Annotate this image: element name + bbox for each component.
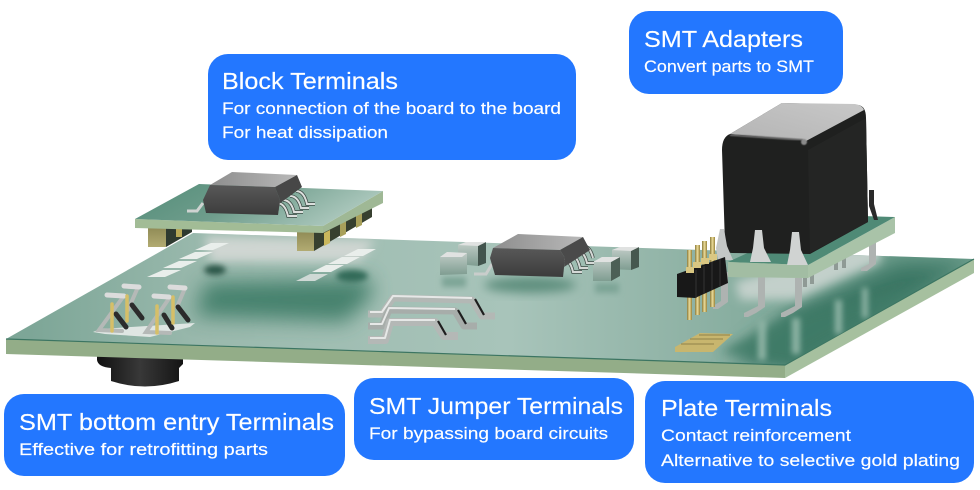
solder pads: block terminal footprint: [147, 243, 376, 281]
callout: SMT Adapters: Convert parts to SMT: [644, 58, 814, 76]
module SOP chip: [187, 172, 315, 216]
callout: Plate Terminals: Contact reinforcement: [661, 427, 851, 445]
small capacitors around center chip: [440, 242, 639, 281]
standoff blocks: [148, 203, 372, 251]
adapter cones: [716, 229, 808, 265]
callout: SMT Jumper Terminals: For bypassing board circuits: [369, 425, 608, 443]
callout: SMT bottom entry Terminals: Effective for retrofitting parts: [19, 441, 268, 459]
callout: Plate Terminals: Plate Terminals: [661, 395, 832, 421]
SMT jumper terminals: [368, 296, 495, 340]
callout: SMT Jumper Terminals: [354, 378, 634, 460]
callout: SMT bottom entry Terminals: [4, 394, 345, 476]
shadow beneath SMT adapter: [720, 255, 969, 364]
block terminal module: [135, 172, 383, 251]
callout: Plate Terminals: Alternative to selective gold plating: [661, 452, 960, 470]
relay body: [722, 103, 868, 254]
back pin of adapter: [869, 190, 878, 220]
pin header: [677, 237, 728, 320]
reflections beneath center components: [442, 277, 619, 293]
callout: SMT Adapters: [629, 11, 843, 94]
SMT bottom entry terminals: [93, 286, 195, 337]
callout: Block Terminals: Block Terminals: [222, 68, 398, 94]
module board: [135, 184, 383, 233]
callout: SMT bottom entry Terminals: SMT bottom entry Terminals: [19, 409, 334, 435]
icon: bottom entry terminal body under board: [97, 354, 183, 386]
callout: Block Terminals: For heat dissipation: [222, 124, 388, 142]
callout: Block Terminals: For connection of the board to the board: [222, 100, 561, 118]
SMT adapter with relay: [713, 103, 895, 317]
gold plate terminals: [675, 333, 733, 352]
center SOP chip: [474, 234, 594, 277]
main circuit board: [6, 233, 974, 378]
callout: SMT Adapters: SMT Adapters: [644, 26, 803, 52]
adapter board: [728, 215, 895, 278]
callout: Block Terminals: [208, 54, 576, 160]
callout: Plate Terminals: [645, 381, 974, 483]
callout: SMT Jumper Terminals: SMT Jumper Terminals: [369, 393, 623, 419]
adapter legs: [713, 240, 876, 317]
shadow beneath block terminal board: [195, 236, 375, 322]
